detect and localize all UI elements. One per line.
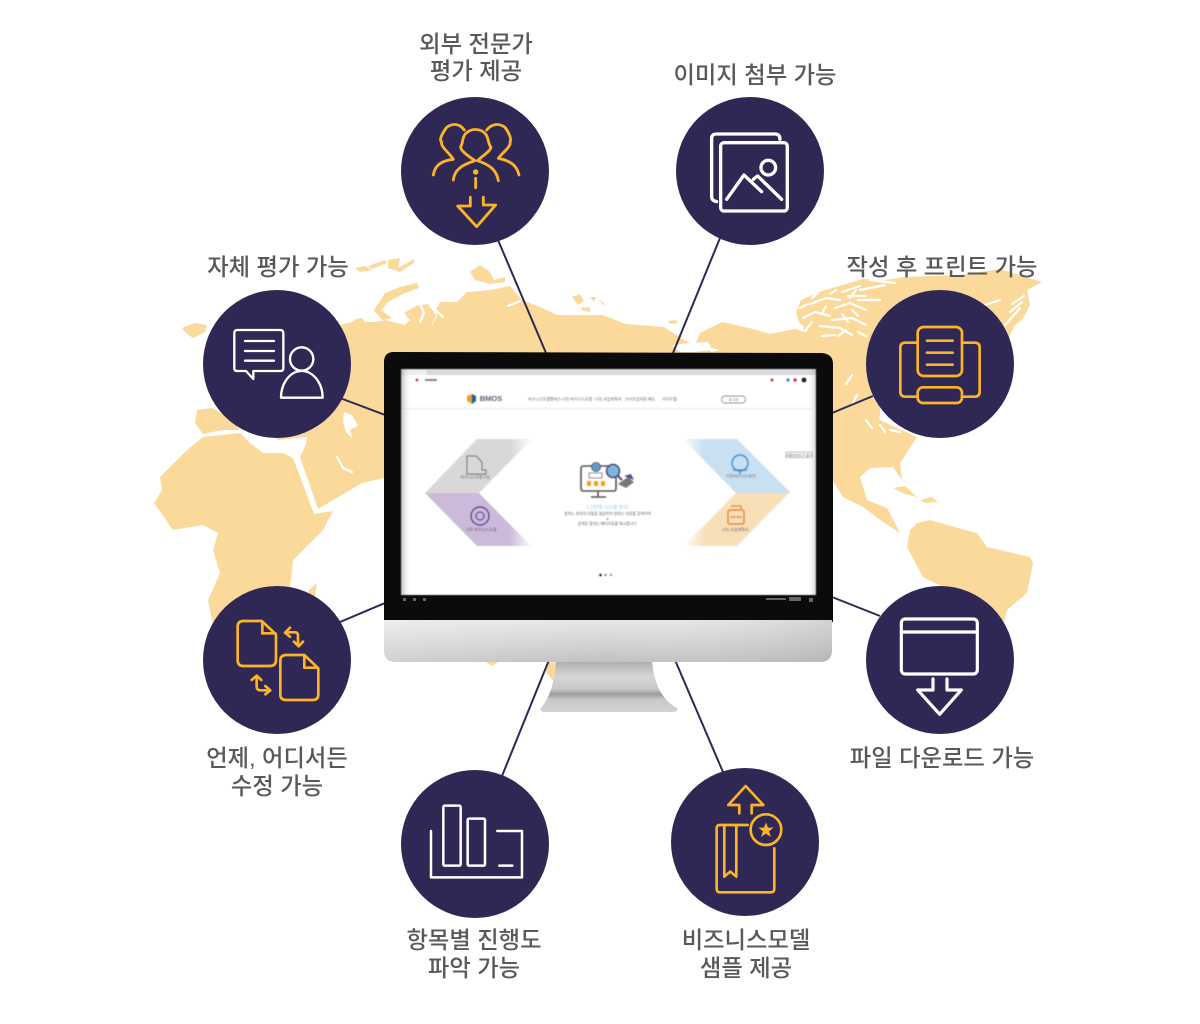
hexagon: orange [684,493,789,546]
label: 자체 평가 가능: 자체 평가 가능 [207,254,349,280]
center text: 검색된 결과는 메타자료를 제시합니다 [577,521,637,526]
label: 언제, 어디서든 수정 가능: 수정 가능 [231,773,323,799]
circle: 이미지 첨부 [676,97,824,245]
hexagon: blue [683,439,791,493]
circle: 외부 전문가 평가 [401,97,549,245]
icon: experts with down arrow [433,125,519,227]
center text [564,504,651,526]
site header: 스타트업지원 제도 [625,396,656,402]
label: 이미지 첨부 가능: 이미지 첨부 가능 [674,62,836,88]
site header: 나의 비즈니스모델 [562,396,593,402]
site header: 나의 사업계획서 [595,396,622,402]
circle: 파일 다운로드 [866,586,1014,734]
site header [401,394,812,408]
circle: 프린트 [866,290,1014,438]
label: 항목별 진행도 파악 가능: 파악 가능 [428,955,520,981]
icon: pictures [712,134,787,211]
center text: 1:1컨택 시스템 분석 [586,504,628,511]
world map background [154,258,1042,682]
page dots [599,574,612,576]
hexagon: grey: 비즈니스모델구성 [460,474,490,480]
center graphic [581,462,634,497]
icon: speech bubble and person [234,330,323,398]
label: 비즈니스모델 샘플 제공 [682,927,810,981]
label: 언제, 어디서든 수정 가능: 언제, 어디서든 [206,745,348,771]
circle: 항목별 진행도 [401,770,549,918]
monitor stand [541,661,677,712]
label: 작성 후 프린트 가능: 작성 후 프린트 가능 [847,254,1037,280]
label: 외부 전문가 평가 제공: 외부 전문가 [419,31,533,57]
icon: window download [901,619,977,714]
label: 비즈니스모델 샘플 제공: 비즈니스모델 [682,927,810,953]
label: 외부 전문가 평가 제공: 평가 제공 [430,58,522,84]
hexagon: blue: 다른비즈니스분석 [726,472,756,478]
site header: 로그인 [729,397,738,402]
connector lines [340,238,880,776]
monitor [384,352,833,712]
site header: 비즈니스모델캔버스 [528,396,561,402]
screen [401,369,816,595]
circle: 비즈니스모델 샘플 [671,768,819,916]
icon: bar chart [431,806,522,877]
site header: BMOS [480,394,502,403]
icon: printer [900,327,980,403]
browser bar [401,369,816,382]
hexagon: purple [425,493,531,546]
hexagon: purple: 나의 비즈니스모델 [466,526,497,532]
label: 파일 다운로드 가능: 파일 다운로드 가능 [850,745,1034,771]
hexagon: orange: 나의 사업계획서 [722,526,749,532]
center text: 원하는 분야의 비용을 절감하여 원하는 자료를 검색하여 [564,511,651,516]
center text: & [606,517,609,521]
icon: documents swap [238,621,318,700]
label: 항목별 진행도 파악 가능 [406,927,542,981]
label: 비즈니스모델 샘플 제공: 샘플 제공 [700,955,792,981]
label: 외부 전문가 평가 제공 [419,31,533,84]
taskbar [403,597,813,602]
circle: 수정 [203,586,351,734]
circle: 자체 평가 [203,290,351,438]
icon: book with star [717,786,781,892]
site header: 사이트맵 [662,396,677,402]
monitor body [384,352,833,622]
label: 언제, 어디서든 수정 가능 [206,745,348,799]
hexagon: grey [425,439,532,493]
side button: 사용안내도구 열기 [786,452,812,458]
label: 항목별 진행도 파악 가능: 항목별 진행도 [406,927,542,953]
map: inland seas and arctic channels [283,342,720,452]
monitor chin [384,620,832,662]
